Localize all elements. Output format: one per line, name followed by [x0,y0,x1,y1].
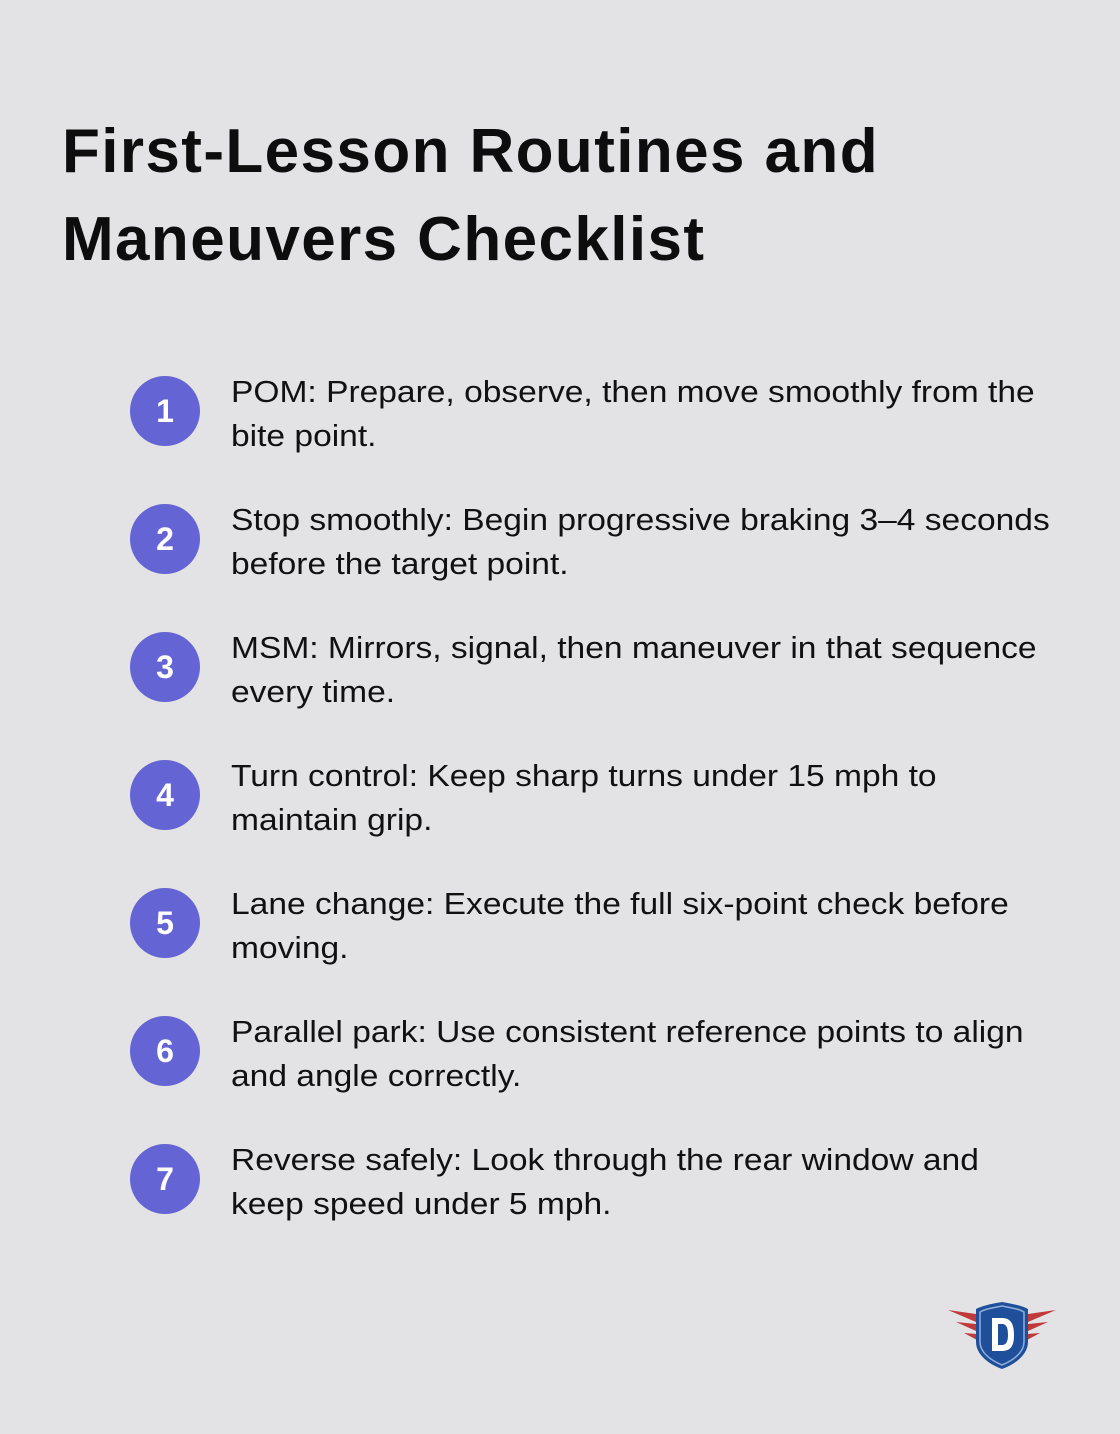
item 5: 5 [156,905,174,941]
item 1: bite point. [231,419,376,453]
item 2: before the target point. [231,547,569,581]
item 3: MSM: Mirrors, signal, then maneuver in that sequence [231,631,1037,665]
item 4: 4 [156,777,174,813]
item 6: and angle correctly. [231,1059,521,1093]
item 3: every time. [231,675,395,709]
item 1: 1 [156,393,174,429]
item 4: Turn control: Keep sharp turns under 15 mph to [231,759,937,793]
logo [948,1302,1056,1369]
item 4: maintain grip. [231,803,432,837]
item 7: 7 [156,1161,174,1197]
item 1: POM: Prepare, observe, then move smoothly from the [231,375,1035,409]
item 7: keep speed under 5 mph. [231,1187,612,1221]
item 3: 3 [156,649,174,685]
item 6: 6 [156,1033,174,1069]
title [62,117,879,274]
item 7 [130,1143,979,1221]
title: First-Lesson Routines and [62,117,879,186]
item 4 [130,759,937,837]
item 5: moving. [231,931,348,965]
item 2: 2 [156,521,174,557]
item 6 [130,1015,1024,1093]
item 3 [130,631,1037,709]
item 7: Reverse safely: Look through the rear window and [231,1143,979,1177]
item 2: Stop smoothly: Begin progressive braking 3–4 seconds [231,503,1050,537]
item 2 [130,503,1050,581]
item 6: Parallel park: Use consistent reference points to align [231,1015,1024,1049]
item 5 [130,887,1009,965]
item 1 [130,375,1035,453]
item 5: Lane change: Execute the full six-point check before [231,887,1009,921]
title: Maneuvers Checklist [62,205,705,274]
